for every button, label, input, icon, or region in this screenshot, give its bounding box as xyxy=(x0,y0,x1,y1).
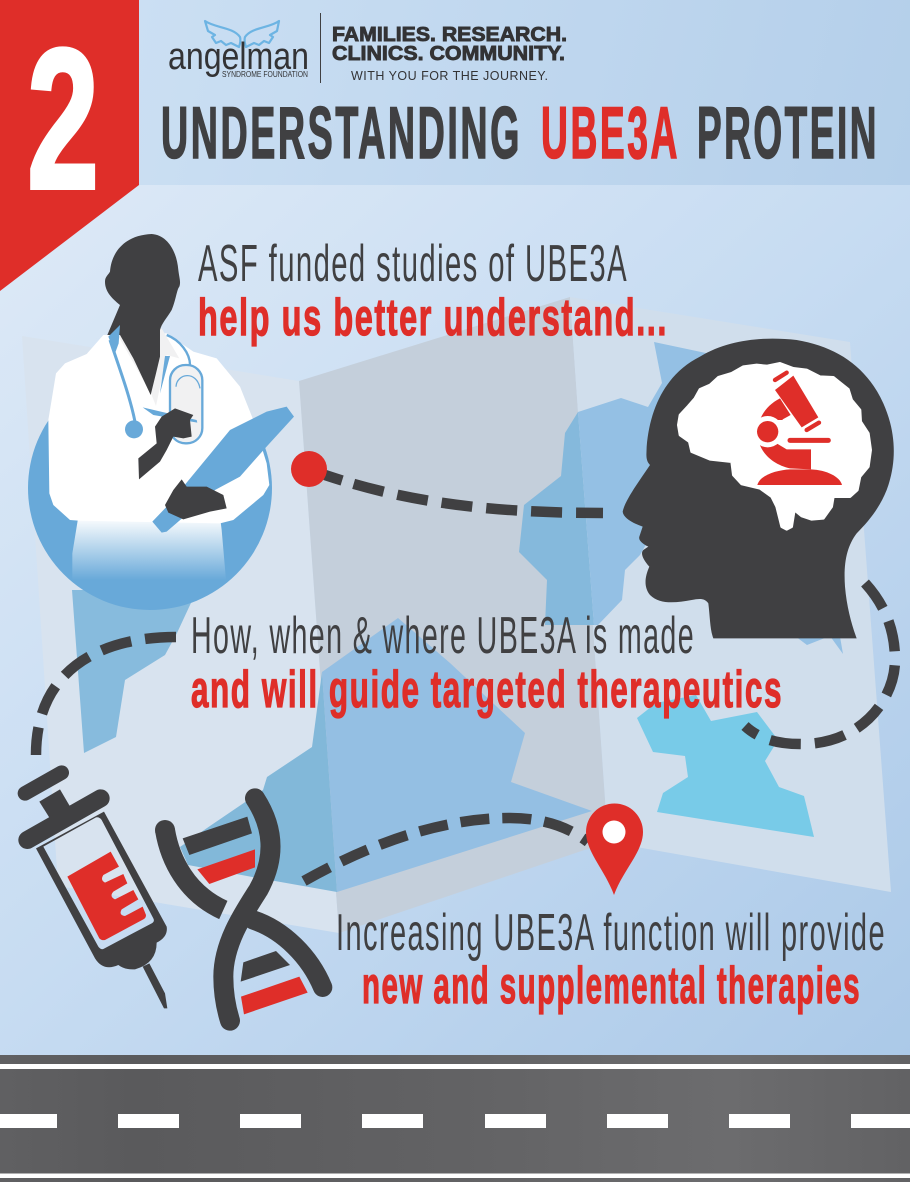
map continent: centre, left of fold xyxy=(180,672,337,892)
dashed route: head down to right curve xyxy=(745,583,895,744)
text block: ASF funded studies xyxy=(198,235,668,347)
map continent: top right, left of fold xyxy=(519,412,594,625)
title: UNDERSTANDING xyxy=(161,93,522,174)
shirt xyxy=(119,328,179,406)
head silhouette xyxy=(623,339,894,638)
brain xyxy=(678,363,871,529)
logo xyxy=(168,21,309,79)
tagline: WITH YOU FOR THE JOURNEY. xyxy=(351,69,548,83)
map continent: right, cyan xyxy=(637,695,814,837)
head and neck silhouette xyxy=(105,234,180,395)
icon: DNA helix xyxy=(155,798,323,1021)
pen xyxy=(143,407,197,423)
dashed route: DNA to pin xyxy=(304,818,588,881)
upper hand xyxy=(138,408,193,479)
tagline xyxy=(332,23,567,83)
icon: map pin xyxy=(586,804,643,895)
blue circle xyxy=(28,366,272,610)
icon: angel wings xyxy=(205,21,279,47)
red corner flag xyxy=(0,0,139,291)
lab coat xyxy=(48,333,269,523)
text block: how, when and where xyxy=(191,607,783,719)
dashed route: dot to head xyxy=(325,475,603,513)
lower hand xyxy=(165,479,227,519)
icon: syringe xyxy=(25,773,167,1008)
map continent: centre, right of fold xyxy=(322,618,592,892)
folded map background xyxy=(22,297,891,933)
map continent: left xyxy=(72,590,197,753)
text block: increasing function xyxy=(336,904,886,1015)
tagline: FAMILIES. RESEARCH. xyxy=(332,23,567,46)
tagline: CLINICS. COMMUNITY. xyxy=(332,42,565,65)
logo divider xyxy=(320,13,321,83)
lab coat lower fade xyxy=(72,517,226,580)
header band xyxy=(139,0,910,185)
title: UBE3A xyxy=(541,93,680,174)
logo wordmark: angelman xyxy=(168,36,309,78)
dashed route: text to syringe xyxy=(36,637,176,755)
clipboard xyxy=(152,407,294,533)
road xyxy=(0,1055,910,1182)
icon: red start dot xyxy=(291,451,327,487)
logo subline: SYNDROME FOUNDATION xyxy=(222,70,308,79)
map continent: top right, right of fold xyxy=(578,342,720,625)
head profile illustration xyxy=(623,339,894,638)
doctor illustration xyxy=(28,234,294,610)
map continent: sliver below head xyxy=(795,625,843,654)
syringe and DNA illustrations xyxy=(25,773,323,1021)
stethoscope xyxy=(108,325,202,443)
step number: 2 xyxy=(27,8,99,231)
icon: microscope xyxy=(752,373,842,485)
